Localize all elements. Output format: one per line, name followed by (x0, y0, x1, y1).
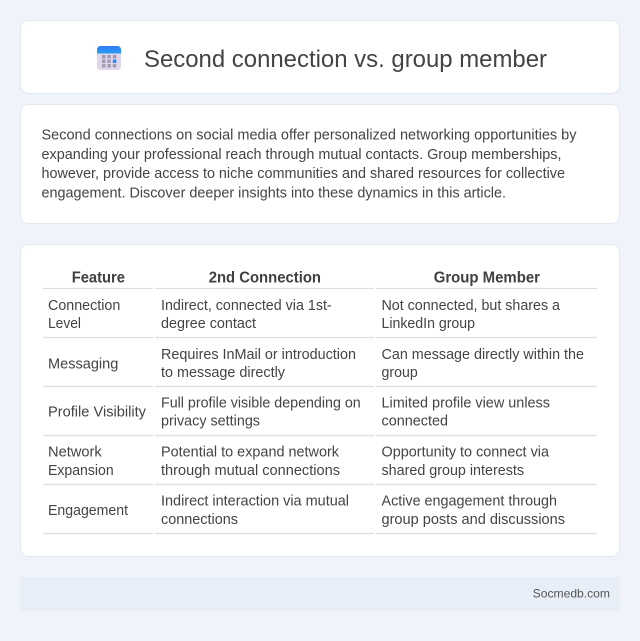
table row: messaging: Requires InMail or introduction (161, 347, 356, 363)
text block: intro paragraph: engagement. Discover deeper insights into these dynamics in this article. (42, 185, 506, 201)
table header row: 2nd Connection (209, 270, 321, 287)
table row: engagement: Engagement (48, 503, 128, 519)
table header row: Group Member (434, 270, 540, 287)
table row: profile visibility: Full profile visible depending on (161, 396, 361, 412)
table header row (43, 270, 597, 288)
table row: messaging: Messaging (48, 356, 118, 372)
table row: connection level: degree contact (161, 316, 256, 332)
table row: network expansion: through mutual connections (161, 463, 340, 479)
table row: messaging (43, 347, 597, 386)
footer bar (20, 577, 620, 611)
text block: intro paragraph: expanding your professional reach through mutual contacts. Group memberships, (42, 147, 562, 163)
table row: connection level: Indirect, connected via 1st- (161, 298, 332, 314)
table row: engagement: Indirect interaction via mutual (161, 494, 349, 510)
table row: connection level: LinkedIn group (382, 316, 475, 332)
title: Second connection vs. group member (144, 46, 547, 73)
table row: network expansion: Potential to expand network (161, 445, 340, 461)
table row: network expansion: Opportunity to connect via (382, 445, 549, 461)
table row: messaging: group (382, 365, 418, 381)
table row: connection level (43, 298, 597, 338)
icon: calendar (97, 46, 121, 70)
table row: network expansion: Network (48, 445, 103, 461)
table row: network expansion: Expansion (48, 463, 114, 479)
table row: engagement: connections (161, 512, 238, 528)
table row: engagement (43, 494, 597, 534)
panel: introduction (20, 104, 620, 224)
table row: profile visibility: Limited profile view unless (382, 396, 550, 412)
table row: messaging: to message directly (161, 365, 286, 381)
panel: title card (20, 20, 620, 94)
panel: comparison table (20, 244, 620, 556)
table row: network expansion (43, 445, 597, 484)
table row: profile visibility: connected (382, 414, 448, 430)
table row: network expansion: shared group interests (382, 463, 524, 479)
table header row: Feature (72, 270, 125, 287)
table row: connection level: Connection (48, 298, 120, 314)
table row: connection level: Not connected, but shares a (382, 298, 560, 314)
table row: messaging: Can message directly within the (382, 347, 584, 363)
table row: profile visibility: privacy settings (161, 414, 260, 430)
text block: intro paragraph (42, 128, 577, 201)
table row: profile visibility: Profile Visibility (48, 405, 147, 421)
table row: engagement: group posts and discussions (382, 512, 565, 528)
text block: intro paragraph: Second connections on social media offer personalized networking opportunities by (42, 128, 577, 144)
footer source credit: Socmedb.com (533, 587, 610, 601)
table row: connection level: Level (48, 316, 81, 332)
table row: engagement: Active engagement through (382, 494, 557, 510)
table row: profile visibility (43, 396, 597, 436)
text block: intro paragraph: however, provide access to niche communities and shared resources for collective (42, 166, 565, 182)
